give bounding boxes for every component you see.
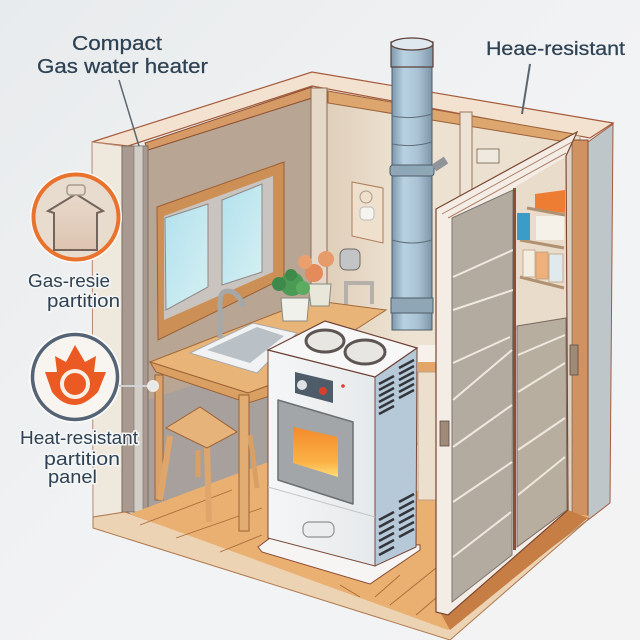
door hinge [440,421,449,446]
wall outlet and hook [340,249,372,306]
door leaf [436,132,577,615]
label: heat-resistant partition panel: panel [48,467,97,487]
label: compact gas water heater: Gas water heater [37,56,208,78]
stool [160,407,257,522]
control panel [295,372,333,403]
sink and tap [190,291,297,373]
lower left wall shade [148,360,270,510]
desk [150,300,386,531]
heater side [375,348,417,566]
corner post [311,88,327,318]
label: gas-resistant partition: partition [47,291,120,311]
top edge of walls [92,72,613,146]
base plate [258,538,420,584]
back wall post [460,112,472,202]
label: heat-resistant partition panel: partition [44,449,120,469]
heater front [268,350,375,566]
label: gas-resistant partition [28,271,120,311]
left door panel [452,190,513,602]
label: gas-resistant partition: Gas-resie [28,271,110,291]
handle [303,522,334,537]
stove window [278,400,353,504]
label: compact gas water heater [37,33,208,146]
lower back wall cabinet [418,345,436,500]
window [157,162,284,340]
panel seams [453,250,565,557]
gas water heater appliance [258,321,420,584]
room structure [92,72,613,520]
right outer wall [588,124,613,520]
wall top trim, right [328,91,574,142]
vertical flue pipe [390,38,446,330]
wall switch plate [352,182,383,243]
heat-resistant folding door panel [436,132,578,615]
label: compact gas water heater: Compact [72,33,162,55]
label: heat-resistant: Heae-resistant [486,39,626,60]
back wall [312,98,580,480]
icon: gas-resistant house [30,171,122,263]
wall bracket [477,149,499,163]
potted plants [272,251,334,321]
vents top [379,360,414,414]
panel divider [513,188,516,550]
left wall interior [148,98,312,510]
vents bottom [379,494,414,555]
open cupboard shelves [515,157,566,330]
callout connector [119,381,158,391]
label: heat-resistant [486,39,626,114]
label: heat-resistant partition panel: Heat-resistant [20,428,138,448]
left corner post [122,146,148,512]
right door panel [517,318,567,547]
label: heat-resistant partition panel [20,428,138,487]
door top stripes [442,142,572,218]
left outer wall panel [92,142,125,517]
right hinge [570,345,578,375]
flame [293,427,338,477]
base seam [268,487,375,517]
floor [93,462,590,640]
right wooden post [572,140,588,518]
wall top trim, left [145,87,312,150]
icon: flame badge [29,331,121,423]
top burners [306,330,344,352]
heater top [268,321,417,377]
